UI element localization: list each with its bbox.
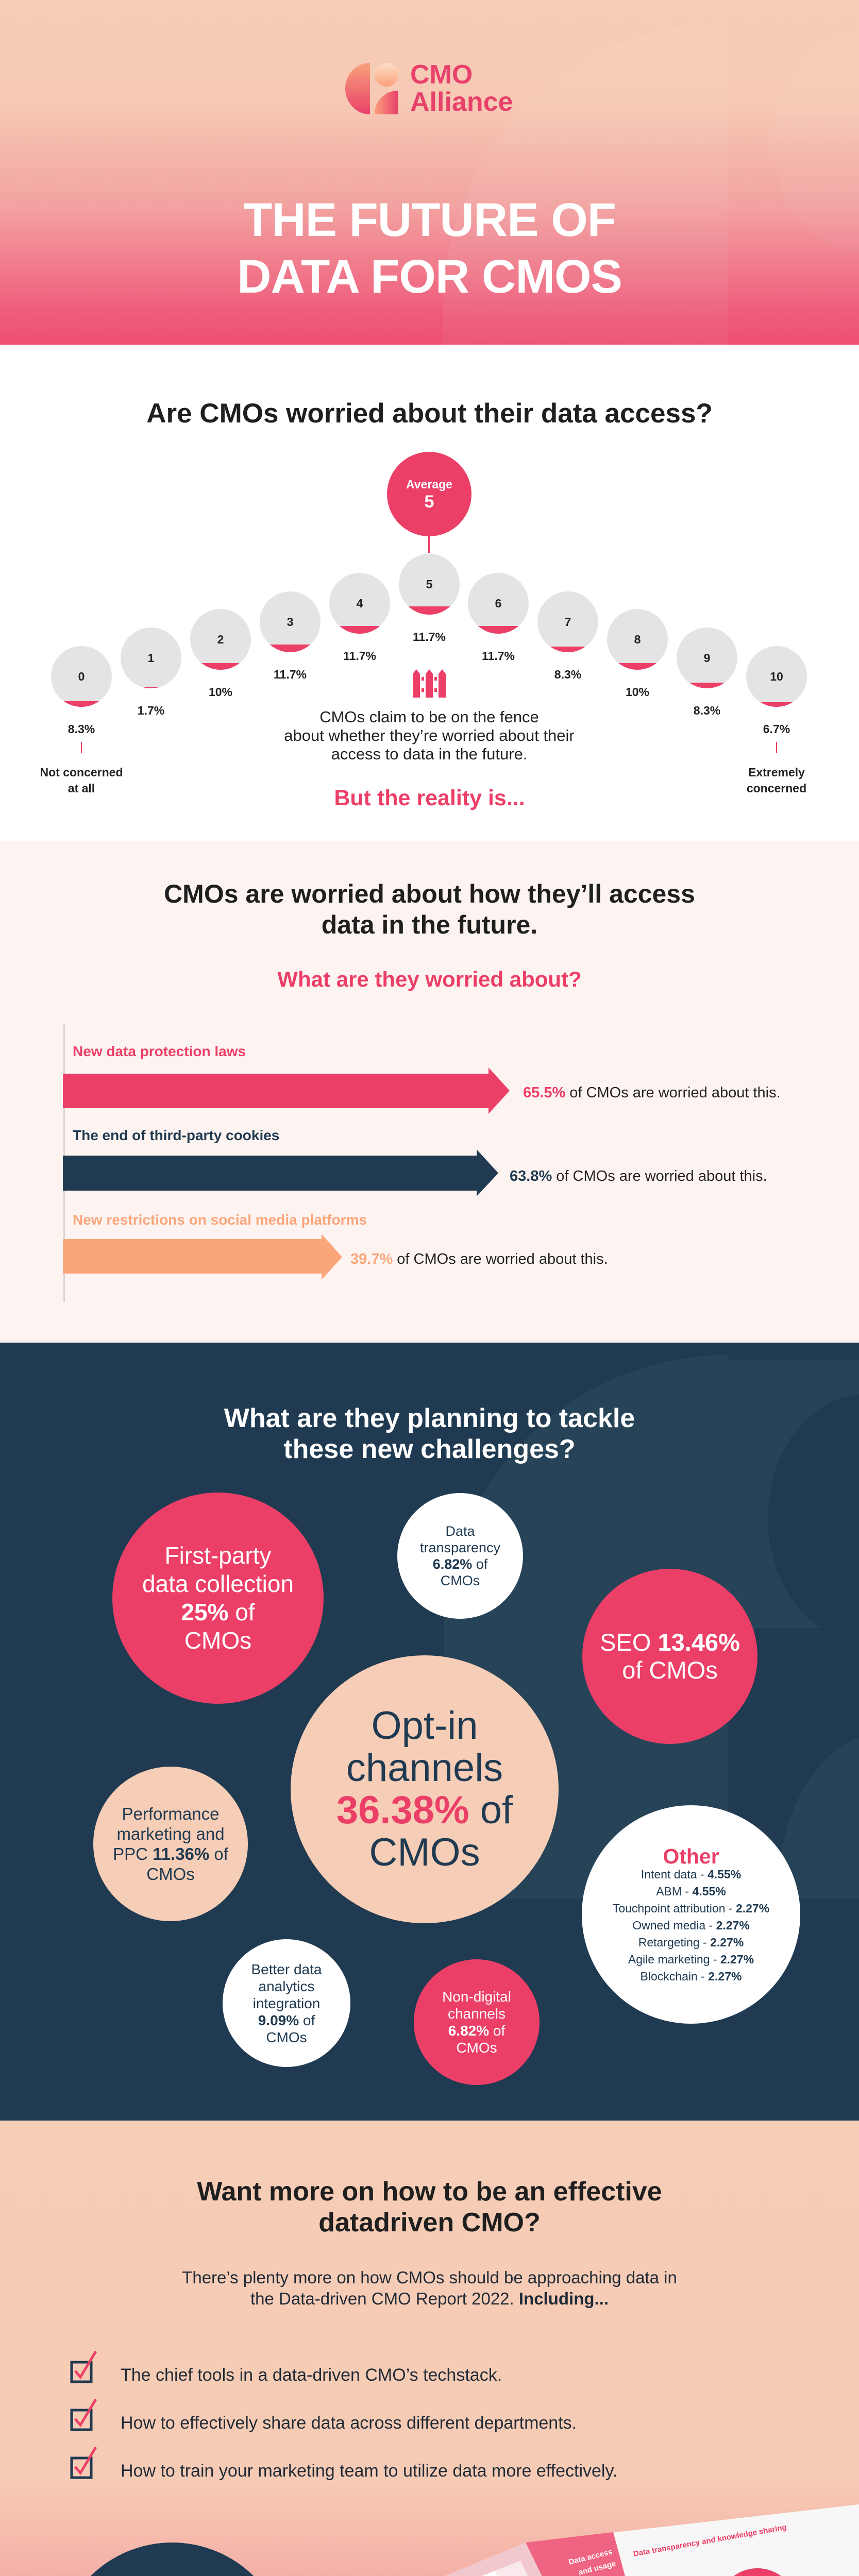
heading: worried how they'll access data: CMOs are worried about how they’ll access bbox=[164, 879, 695, 908]
average badge bbox=[387, 452, 471, 553]
item: techstack bbox=[70, 2350, 502, 2385]
text: intro paragraph bbox=[182, 2268, 677, 2308]
bubble: opt-in channels: CMOs bbox=[369, 1831, 480, 1874]
image: report brochure: Data transparency and knowledge sharing bbox=[633, 2523, 787, 2558]
scale circles 0-10: 7 bbox=[565, 615, 571, 629]
bar: new data protection laws bbox=[63, 1043, 781, 1114]
scale circles 0-10 bbox=[51, 554, 807, 736]
scale circles 0-10: 1.7% bbox=[138, 704, 164, 717]
bubble: performance marketing: Performance bbox=[122, 1804, 219, 1823]
bubble: other: Blockchain - 2.27% bbox=[641, 1969, 742, 1982]
checklist bbox=[70, 2350, 617, 2481]
bubble: better data analytics: 9.09% of bbox=[258, 2012, 315, 2028]
bubble: non-digital channels: channels bbox=[448, 2006, 506, 2022]
label: not concerned at all bbox=[40, 742, 123, 795]
bubble: data transparency bbox=[397, 1493, 523, 1619]
scale circles 0-10: 11.7% bbox=[343, 649, 376, 663]
scale circles 0-10: 5 bbox=[426, 578, 432, 591]
bar: end of third-party cookies: The end of third-party cookies bbox=[73, 1127, 279, 1143]
bubble: data transparency: CMOs bbox=[441, 1573, 480, 1588]
bubble: first-party data collection: First-party bbox=[165, 1542, 271, 1569]
text: on the fence: access to data in the future. bbox=[331, 745, 527, 763]
bubble: opt-in channels bbox=[291, 1655, 559, 1923]
subheading: what are they worried about: What are they worried about? bbox=[277, 967, 582, 991]
text: but the reality is: But the reality is... bbox=[334, 786, 525, 810]
scale circles 0-10: 8.3% bbox=[694, 704, 720, 717]
bubble: other: Owned media - 2.27% bbox=[632, 1919, 750, 1932]
scale circles 0-10: 11.7% bbox=[413, 630, 446, 643]
label: extremely concerned: Extremely bbox=[748, 766, 805, 779]
bar: new restrictions on social media bbox=[63, 1212, 608, 1280]
bubble: opt-in channels: channels bbox=[346, 1746, 503, 1790]
bubble: data transparency: transparency bbox=[420, 1540, 500, 1555]
heading: planning to tackle: What are they planning to tackle bbox=[224, 1403, 635, 1433]
bubble: SEO bbox=[582, 1569, 757, 1744]
scale circles 0-10: 8 bbox=[634, 633, 641, 646]
bar: new restrictions on social media: 39.7% of CMOs are worried about this. bbox=[350, 1251, 608, 1267]
logo: header: CMO bbox=[410, 60, 473, 90]
bubble: other: Touchpoint attribution - 2.27% bbox=[613, 1901, 769, 1914]
bubble: performance marketing bbox=[93, 1767, 248, 1921]
bubble: other: Other bbox=[663, 1844, 719, 1868]
heading: worried about data access: Are CMOs worried about their data access? bbox=[146, 398, 713, 429]
bubble: opt-in channels: Opt-in bbox=[371, 1704, 478, 1748]
label: extremely concerned: concerned bbox=[747, 782, 806, 795]
logo: header: Alliance bbox=[410, 87, 513, 117]
heading: worried how they'll access data: data in the future. bbox=[322, 910, 537, 939]
scale circles 0-10: 2 bbox=[217, 633, 224, 646]
heading: planning to tackle: these new challenges? bbox=[283, 1434, 576, 1464]
label: not concerned at all: at all bbox=[68, 782, 95, 795]
scale circles 0-10: 10% bbox=[209, 685, 232, 699]
bubble: opt-in channels: 36.38% of bbox=[336, 1788, 513, 1832]
scale circles 0-10: 6.7% bbox=[763, 722, 790, 736]
average badge: 5 bbox=[425, 492, 434, 512]
scale circles 0-10: 8.3% bbox=[68, 722, 95, 736]
bubble: better data analytics: CMOs bbox=[266, 2029, 307, 2045]
bubble: first-party data collection bbox=[112, 1493, 324, 1704]
heading: planning to tackle bbox=[224, 1403, 635, 1464]
bubble: performance marketing: marketing and bbox=[116, 1824, 225, 1843]
callout: head to website bbox=[56, 2543, 288, 2576]
text: intro paragraph: the Data-driven CMO Report 2022. Including... bbox=[250, 2289, 609, 2308]
bubble: SEO: SEO 13.46% bbox=[600, 1629, 740, 1656]
bar: new data protection laws: New data protection laws bbox=[73, 1043, 246, 1059]
title: THE FUTURE OF bbox=[243, 194, 616, 246]
bubble: first-party data collection: data collection bbox=[142, 1570, 294, 1597]
bubble: data transparency: 6.82% of bbox=[433, 1556, 487, 1572]
heading: worried how they'll access data bbox=[164, 879, 695, 939]
bubble: better data analytics: analytics bbox=[259, 1978, 314, 1994]
scale circles 0-10: 11.7% bbox=[274, 668, 307, 681]
heading: want more: datadriven CMO? bbox=[318, 2208, 541, 2238]
scale circles 0-10: 0 bbox=[78, 670, 85, 683]
scale circles 0-10: 1 bbox=[148, 651, 154, 665]
scale circles 0-10: 8.3% bbox=[554, 668, 581, 681]
bubble: non-digital channels bbox=[414, 1959, 540, 2085]
bubble: other: Retargeting - 2.27% bbox=[638, 1935, 744, 1948]
panel: worries section bbox=[0, 841, 859, 1343]
scale circles 0-10: 10 bbox=[770, 670, 783, 683]
average badge: Average bbox=[406, 478, 452, 491]
image: report brochure: Data access bbox=[568, 2547, 613, 2567]
text: on the fence bbox=[284, 708, 575, 763]
bubble: non-digital channels: CMOs bbox=[456, 2040, 497, 2056]
title: DATA FOR CMOS bbox=[237, 250, 622, 303]
item: train team bbox=[70, 2446, 617, 2481]
bubble: better data analytics bbox=[223, 1939, 350, 2067]
bubble: performance marketing: PPC 11.36% of bbox=[113, 1844, 228, 1863]
bubble: better data analytics: Better data bbox=[251, 1961, 322, 1977]
scale circles 0-10: 10% bbox=[626, 685, 649, 699]
heading: want more: Want more on how to be an effective bbox=[197, 2177, 662, 2207]
bubble: better data analytics: integration bbox=[253, 1995, 320, 2011]
icon: fence bbox=[413, 669, 446, 698]
item: techstack: The chief tools in a data-driven CMO’s techstack. bbox=[121, 2365, 502, 2385]
heading: want more bbox=[197, 2177, 662, 2238]
bar: new data protection laws: 65.5% of CMOs are worried about this. bbox=[523, 1084, 781, 1101]
scale circles 0-10: 4 bbox=[357, 597, 363, 610]
bar: end of third-party cookies bbox=[63, 1127, 767, 1196]
bubble: other: ABM - 4.55% bbox=[656, 1885, 726, 1898]
bubble: first-party data collection: 25% of bbox=[181, 1599, 255, 1625]
bubble: SEO: of CMOs bbox=[622, 1656, 718, 1684]
bubble: other: Agile marketing - 2.27% bbox=[628, 1953, 754, 1966]
bubble: first-party data collection: CMOs bbox=[184, 1627, 251, 1654]
label: extremely concerned bbox=[747, 742, 806, 795]
bubble: non-digital channels: Non-digital bbox=[442, 1989, 511, 2005]
panel: solutions section bbox=[0, 1343, 859, 2121]
text: on the fence: about whether they’re worried about their bbox=[284, 726, 575, 744]
label: not concerned at all: Not concerned bbox=[40, 766, 123, 779]
bubble: performance marketing: CMOs bbox=[146, 1865, 195, 1884]
image: report brochure bbox=[445, 2504, 859, 2576]
bar: new restrictions on social media: New restrictions on social media platforms bbox=[73, 1212, 367, 1228]
item: train team: How to train your marketing team to utilize data more effectively. bbox=[121, 2461, 617, 2481]
header band bbox=[0, 0, 859, 345]
bar: end of third-party cookies: 63.8% of CMOs are worried about this. bbox=[510, 1168, 767, 1184]
text: on the fence: CMOs claim to be on the fence bbox=[319, 708, 539, 726]
title bbox=[237, 194, 622, 303]
bubble: data transparency: Data bbox=[445, 1523, 475, 1539]
bubble: non-digital channels: 6.82% of bbox=[448, 2023, 505, 2039]
scale circles 0-10: 9 bbox=[704, 651, 710, 665]
logo: header bbox=[345, 60, 513, 117]
scale circles 0-10: 11.7% bbox=[482, 649, 515, 663]
scale circles 0-10: 3 bbox=[287, 615, 293, 629]
bubble: other: Intent data - 4.55% bbox=[641, 1867, 741, 1880]
item: share data bbox=[70, 2399, 577, 2433]
bubble: other bbox=[582, 1805, 800, 2024]
text: intro paragraph: There’s plenty more on how CMOs should be approaching data in bbox=[182, 2268, 677, 2287]
item: share data: How to effectively share data across different departments. bbox=[121, 2413, 577, 2433]
scale circles 0-10: 6 bbox=[495, 597, 501, 610]
panel: more resources bbox=[0, 2121, 859, 2576]
